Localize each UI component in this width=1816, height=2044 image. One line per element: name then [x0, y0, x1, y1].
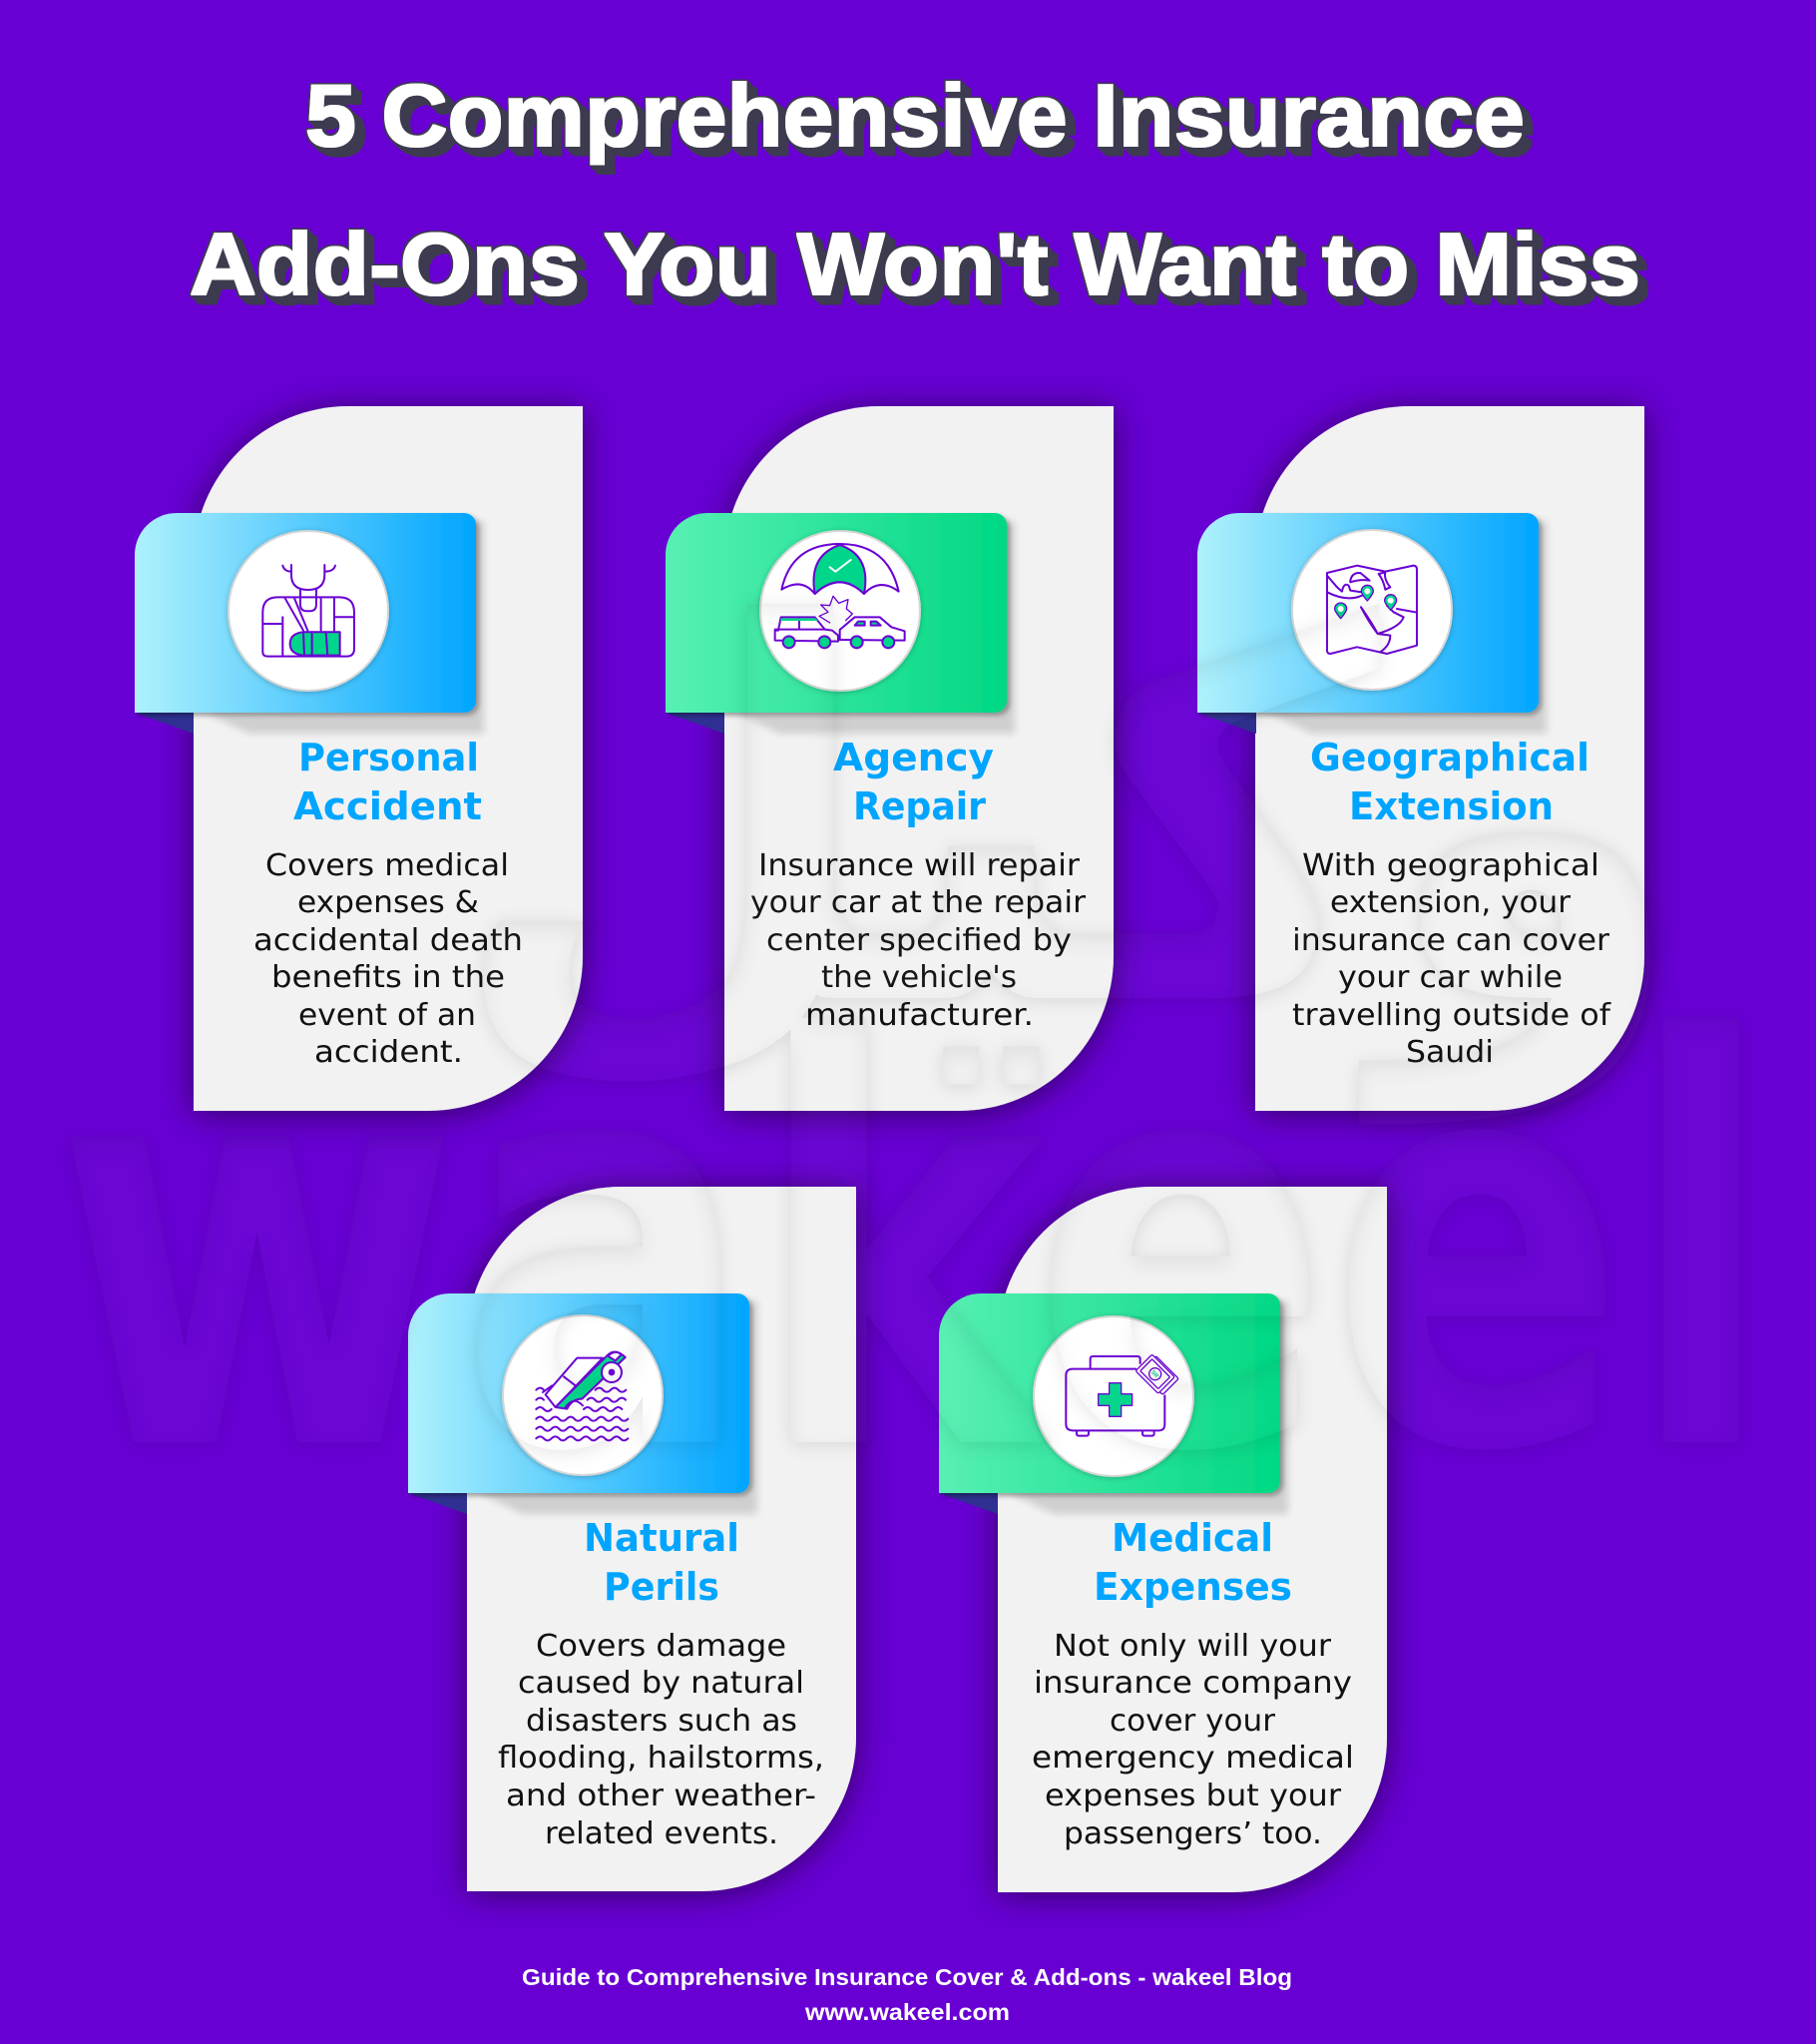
icon: first aid kit with money: [1034, 1316, 1193, 1476]
heading: agency repair: [833, 736, 994, 828]
tab: medical expenses: [939, 1293, 1288, 1514]
text: natural perils: caused by natural: [518, 1666, 804, 1701]
text: medical expenses: emergency medical: [1032, 1741, 1354, 1776]
panel: personal accident: [135, 406, 583, 1111]
text: geographical extension: Saudi: [1406, 1035, 1494, 1070]
text: personal accident: accident.: [314, 1035, 463, 1070]
watermark: wakeel logo: [55, 516, 1776, 1575]
footer: [522, 1964, 1292, 2025]
tab: personal accident: [135, 513, 484, 734]
text: geographical extension: [1292, 848, 1612, 1070]
heading: natural perils: Perils: [604, 1565, 719, 1609]
heading: geographical extension: [1310, 736, 1589, 828]
text: personal accident: event of an: [298, 998, 476, 1033]
text: natural perils: Covers damage: [536, 1629, 786, 1664]
icon: car sinking in flood: [503, 1315, 663, 1475]
tab: geographical extension: [1197, 513, 1547, 734]
text: natural perils: [498, 1629, 824, 1851]
text: agency repair: the vehicle's: [821, 960, 1017, 995]
icon: map with pins: [1292, 530, 1452, 690]
text: medical expenses: expenses but your: [1045, 1779, 1342, 1813]
text: agency repair: Insurance will repair: [758, 848, 1081, 883]
text: personal accident: accidental death: [253, 923, 523, 958]
heading: natural perils: Natural: [584, 1516, 739, 1560]
panel: medical expenses: [939, 1187, 1387, 1892]
tab: agency repair: [666, 513, 1015, 734]
text: geographical extension: insurance can cover: [1292, 923, 1610, 958]
text: natural perils: and other weather-: [506, 1779, 816, 1813]
text: medical expenses: insurance company: [1034, 1666, 1352, 1701]
title: 5 Comprehensive Insurance: [305, 66, 1525, 165]
title: Add-Ons You Won't Want to Miss: [190, 215, 1640, 313]
title: [190, 66, 1640, 313]
text: agency repair: your car at the repair: [750, 885, 1087, 920]
text: natural perils: disasters such as: [526, 1704, 797, 1739]
text: medical expenses: passengers’ too.: [1064, 1816, 1322, 1851]
heading: medical expenses: [1094, 1516, 1292, 1609]
text: agency repair: manufacturer.: [805, 998, 1034, 1033]
heading: personal accident: Personal: [298, 736, 479, 779]
heading: geographical extension: Extension: [1349, 784, 1554, 828]
text: geographical extension: travelling outside of: [1292, 998, 1612, 1033]
panel: agency repair: [666, 406, 1114, 1111]
panel: natural perils: [408, 1187, 856, 1891]
text: geographical extension: your car while: [1338, 960, 1563, 995]
heading: agency repair: Repair: [853, 784, 986, 828]
heading: personal accident: Accident: [293, 784, 482, 828]
text: natural perils: related events.: [545, 1816, 778, 1851]
heading: natural perils: [584, 1516, 739, 1609]
footer: Guide to Comprehensive Insurance Cover & Add-ons - wakeel Blog: [522, 1964, 1292, 1990]
text: personal accident: benefits in the: [271, 960, 505, 995]
text: personal accident: [253, 848, 523, 1070]
icon: umbrella over crashed cars: [760, 531, 920, 691]
heading: medical expenses: Medical: [1112, 1516, 1273, 1560]
text: agency repair: center specified by: [766, 923, 1072, 958]
text: medical expenses: [1032, 1629, 1354, 1851]
text: personal accident: expenses &: [297, 885, 479, 920]
text: natural perils: flooding, hailstorms,: [498, 1741, 824, 1776]
text: agency repair: [750, 848, 1087, 1033]
watermark: wakeel logo: وكيل: [449, 516, 1686, 1128]
heading: personal accident: [293, 736, 482, 828]
text: medical expenses: Not only will your: [1054, 1629, 1332, 1664]
heading: agency repair: Agency: [833, 736, 994, 779]
heading: geographical extension: Geographical: [1310, 736, 1589, 779]
tab: natural perils: [408, 1293, 757, 1514]
text: geographical extension: With geographical: [1302, 848, 1599, 883]
icon: first aid kit with money: SR: [1149, 1369, 1159, 1379]
heading: medical expenses: Expenses: [1094, 1565, 1292, 1609]
text: personal accident: Covers medical: [265, 848, 509, 883]
text: geographical extension: extension, your: [1330, 885, 1572, 920]
panel: geographical extension: [1197, 406, 1644, 1111]
text: medical expenses: cover your: [1110, 1704, 1276, 1739]
footer: www.wakeel.com: [804, 1999, 1010, 2025]
icon: arm in sling: [228, 531, 388, 691]
